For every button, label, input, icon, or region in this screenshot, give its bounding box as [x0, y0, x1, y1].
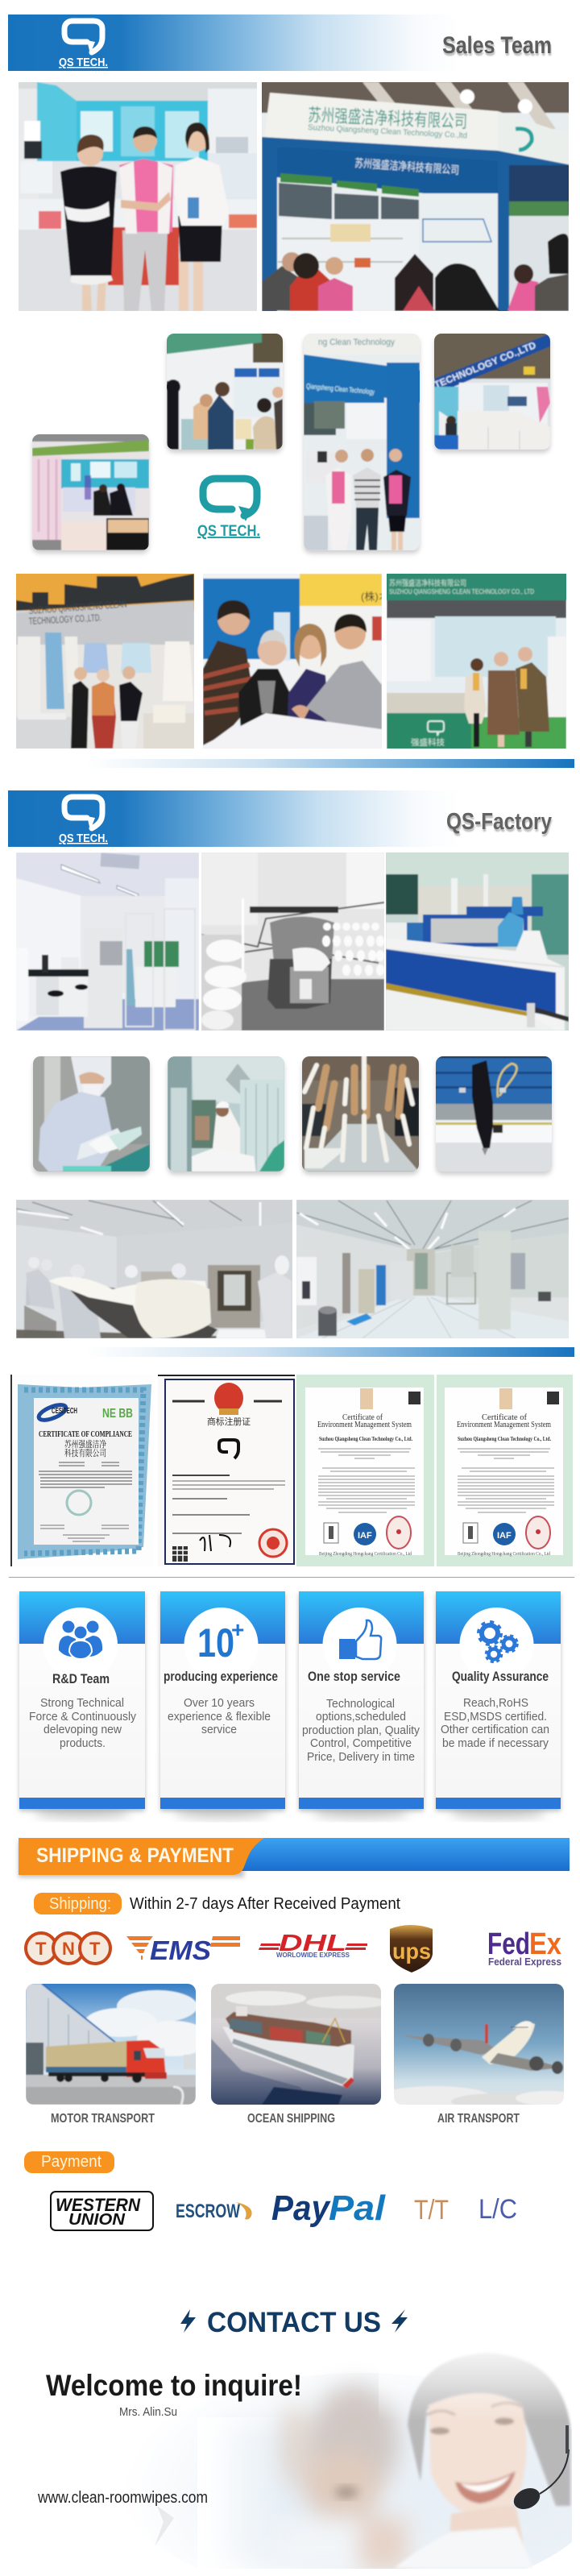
certificate: environment management 2: Environment Management System: [457, 1421, 551, 1429]
photo: three people at blue booth: Qiangsheng Clean Technology: [306, 382, 375, 396]
certificate: compliance: 科技有限公司: [64, 1447, 106, 1458]
divider strip: [85, 759, 574, 768]
photo: workers at cleanroom table: [16, 1200, 292, 1338]
photo: motor transport truck: [26, 1984, 196, 2105]
text: shipping time: Within 2-7 days After Received Payment: [130, 1895, 400, 1913]
photo: handshake group: [203, 574, 389, 749]
logo: DHL: DHL: [279, 1931, 346, 1956]
label: Shipping pill: Shipping:: [49, 1895, 111, 1913]
photo: exhibition booth with company sign: [262, 82, 569, 311]
text: card body: [302, 1697, 420, 1764]
panel: R&D Team: [19, 1591, 145, 1809]
photo: handshake group: (株)オ: [361, 591, 389, 603]
heading: card title: One stop service: [308, 1669, 400, 1684]
heading: card title: producing experience: [164, 1669, 278, 1684]
logo: L/C: L/C: [478, 2194, 517, 2225]
certificate: trademark registration: 商标注册证: [207, 1416, 251, 1427]
icon: headset mic: [511, 2425, 569, 2513]
logo: DHL: [259, 1931, 367, 1959]
certificate: compliance: CERTIFICATE OF COMPLIANCE: [39, 1430, 132, 1439]
logo: Western Union: UNION: [68, 2211, 126, 2229]
photo: three women at booth: [387, 574, 566, 749]
certificate: compliance: CESITECH: [52, 1407, 77, 1416]
certificate: environment management 2: IAF: [497, 1531, 512, 1541]
heading: card title: R&D Team: [52, 1671, 110, 1686]
photo: exhibition booth with company sign: 苏州强盛洁净科技有限公司: [354, 156, 460, 176]
text: card body: [168, 1696, 271, 1736]
photo: white booth with blue banner: [434, 334, 550, 450]
text: card body: Technological: [326, 1697, 395, 1711]
logo: PayPal: Pay: [271, 2188, 331, 2228]
icon: thumbs up: [339, 1620, 381, 1659]
photo: ocean shipping vessel: [211, 1984, 381, 2105]
photo: visitors at booth: [167, 334, 283, 450]
text: contact name: Mrs. Alin.Su: [119, 2405, 177, 2419]
icon: pale chevron: [155, 2506, 174, 2546]
logo: FedEx: [487, 1927, 561, 1968]
certificate: compliance: NE BB: [102, 1407, 133, 1421]
logo: TNT: T: [89, 1939, 101, 1959]
text: card body: Strong Technical: [40, 1696, 124, 1710]
photo: three people at blue booth: [304, 334, 420, 550]
photo: booth with pink garments: [32, 434, 149, 550]
icon: 10+: 10: [197, 1620, 234, 1665]
certificate: environment management 1: [296, 1375, 434, 1566]
divider strip: [85, 1347, 574, 1357]
photo: laser cutting head: [436, 1056, 552, 1172]
label: Payment pill: Payment: [41, 2153, 102, 2171]
certificate: environment management 1: Environment Management System: [317, 1421, 412, 1429]
certificate: compliance: [10, 1375, 154, 1566]
logo: Western Union: [51, 2192, 153, 2230]
heading: Sales Team: Sales Team: [442, 32, 552, 59]
panel: One stop service: [299, 1591, 424, 1809]
photo: three women at booth: SUZHOU QIANGSHENG CLEAN TECHNOLOGY CO., LTD: [389, 588, 534, 595]
photo: laboratory cleanroom: [16, 852, 199, 1031]
logo: TNT: [26, 1933, 110, 1964]
label: Shipping pill: [34, 1893, 122, 1914]
caption: air transport: AIR TRANSPORT: [437, 2112, 520, 2126]
text: card body: production plan, Quality: [302, 1724, 420, 1737]
photo: exhibition booth with company sign: 苏州强盛洁净科技有限公司: [308, 105, 468, 132]
logo: PayPal: Pal: [329, 2188, 386, 2228]
logo: TNT: T: [35, 1939, 47, 1959]
photo: three people at blue booth: ng Clean Technology: [318, 338, 395, 347]
label: Payment pill: [24, 2151, 114, 2173]
caption: motor transport: MOTOR TRANSPORT: [51, 2112, 155, 2126]
text: card body: be made if necessary: [442, 1736, 549, 1750]
certificate: environment management 1: Suzhou Qiangsheng Clean Technology Co., Ltd.: [319, 1435, 412, 1442]
text: card body: [441, 1696, 549, 1750]
logo: Escrow: ESCROW: [176, 2201, 240, 2222]
logo: T/T: T/T: [414, 2195, 449, 2225]
text: card body: Over 10 years: [184, 1696, 255, 1710]
photo: white booth with blue banner: TECHNOLOGY CO.,LTD: [433, 339, 538, 391]
photo: call center agent: [189, 2354, 572, 2569]
panel: producing experience: [160, 1591, 285, 1809]
logo: FedEx: Ex: [529, 1927, 561, 1961]
photo: air transport airplane: [394, 1984, 564, 2105]
certificate: environment management 2: [437, 1375, 573, 1566]
certificate: compliance: 苏州强盛洁净: [64, 1438, 106, 1450]
heading: card title: Quality Assurance: [452, 1669, 549, 1684]
icon: teal QS TECH logo: [197, 479, 260, 540]
certificate: environment management 1: Certificate of: [342, 1413, 383, 1422]
icon: QS logo: [64, 797, 102, 828]
certificate: trademark registration: [158, 1375, 295, 1566]
photo: swab production rack: [302, 1056, 419, 1172]
text: card body: delevoping new: [44, 1723, 122, 1736]
photo: blue laser cutting workshop: [386, 852, 569, 1031]
icon: gears: [478, 1622, 517, 1661]
logo: PayPal: [271, 2188, 386, 2228]
certificate: environment management 2: Beijing Zhongding Hongchang Certification Co., Ltd: [458, 1551, 551, 1557]
logo: TNT: N: [62, 1939, 75, 1959]
photo: three staff at booth: [19, 82, 257, 311]
caption: ocean shipping: OCEAN SHIPPING: [247, 2112, 335, 2126]
icon: team: [59, 1621, 102, 1659]
text: website: www.clean-roomwipes.com: [37, 2489, 208, 2507]
logo: EMS: [126, 1935, 240, 1965]
icon: 10+: +: [231, 1617, 244, 1642]
text: card body: options,scheduled: [316, 1710, 406, 1724]
text: card body: Force & Continuously: [29, 1710, 136, 1724]
photo: worker in cleanroom suit: [33, 1056, 150, 1172]
panel: Quality Assurance: [436, 1591, 561, 1809]
text: card body: [29, 1696, 136, 1750]
certificate: environment management 1: Beijing Zhongding Hongchang Certification Co., Ltd: [319, 1551, 412, 1557]
banner: Shipping & Payment: [19, 1838, 570, 1875]
photo: booth with garments on wall: SUZHOU QIANGSHENG CLEAN: [28, 599, 127, 616]
banner: Sales Team: QS TECH.: [59, 56, 108, 69]
photo: grayscale knitting machine: [201, 852, 384, 1031]
photo: booth with garments on wall: TECHNOLOGY CO.,LTD.: [28, 612, 102, 627]
banner: Sales Team: [8, 15, 572, 71]
text: card body: experience & flexible: [168, 1710, 271, 1724]
icon: teal QS TECH logo: QS TECH.: [197, 523, 260, 540]
photo: three women at booth: 强盛科技: [411, 737, 445, 748]
banner: QS-Factory: [8, 790, 572, 847]
text: card body: Reach,RoHS: [463, 1696, 528, 1710]
banner: QS-Factory: QS TECH.: [59, 832, 108, 845]
text: card body: Price, Delivery in time: [307, 1750, 415, 1764]
photo: empty cleanroom corridor: [296, 1200, 569, 1338]
heading: Shipping & Payment: SHIPPING & PAYMENT: [36, 1844, 234, 1867]
logo: UPS: ups: [392, 1939, 431, 1964]
text: card body: Control, Competitive: [310, 1736, 412, 1750]
text: card body: service: [201, 1723, 237, 1736]
logo: DHL: WORLOWIDE EXPRESS: [276, 1951, 350, 1959]
photo: operator behind plastic curtain: [168, 1056, 284, 1172]
certificate: environment management 2: Certificate of: [482, 1413, 528, 1422]
heading: Contact Us: CONTACT US: [207, 2307, 381, 2338]
photo: exhibition booth with company sign: Suzhou Qiangsheng Clean Technology Co.,ltd: [308, 123, 467, 140]
logo: FedEx: Fed: [487, 1927, 530, 1961]
logo: cert mark: [37, 1402, 68, 1423]
text: card body: Other certification can: [441, 1723, 549, 1736]
photo: booth with garments on wall: [16, 574, 194, 749]
icon: Q trademark: [219, 1440, 238, 1458]
heading: Welcome to inquire: Welcome to inquire!: [46, 2369, 302, 2402]
logo: UPS: [390, 1925, 433, 1972]
logo: EMS: EMS: [150, 1935, 211, 1965]
logo: FedEx: Federal Express: [488, 1956, 561, 1968]
text: card body: ESD,MSDS certified.: [444, 1710, 547, 1724]
certificate: environment management 2: Suzhou Qiangsheng Clean Technology Co., Ltd.: [458, 1435, 551, 1442]
photo: three women at booth: 苏州强盛洁净科技有限公司: [389, 579, 466, 588]
stamp: red seal: [259, 1529, 287, 1557]
icon: QS logo: [64, 21, 102, 52]
logo: Western Union: WESTERN: [56, 2195, 141, 2215]
heading: QS-Factory: QS-Factory: [446, 809, 552, 835]
text: card body: products.: [60, 1736, 106, 1750]
certificate: environment management 1: IAF: [358, 1531, 372, 1541]
